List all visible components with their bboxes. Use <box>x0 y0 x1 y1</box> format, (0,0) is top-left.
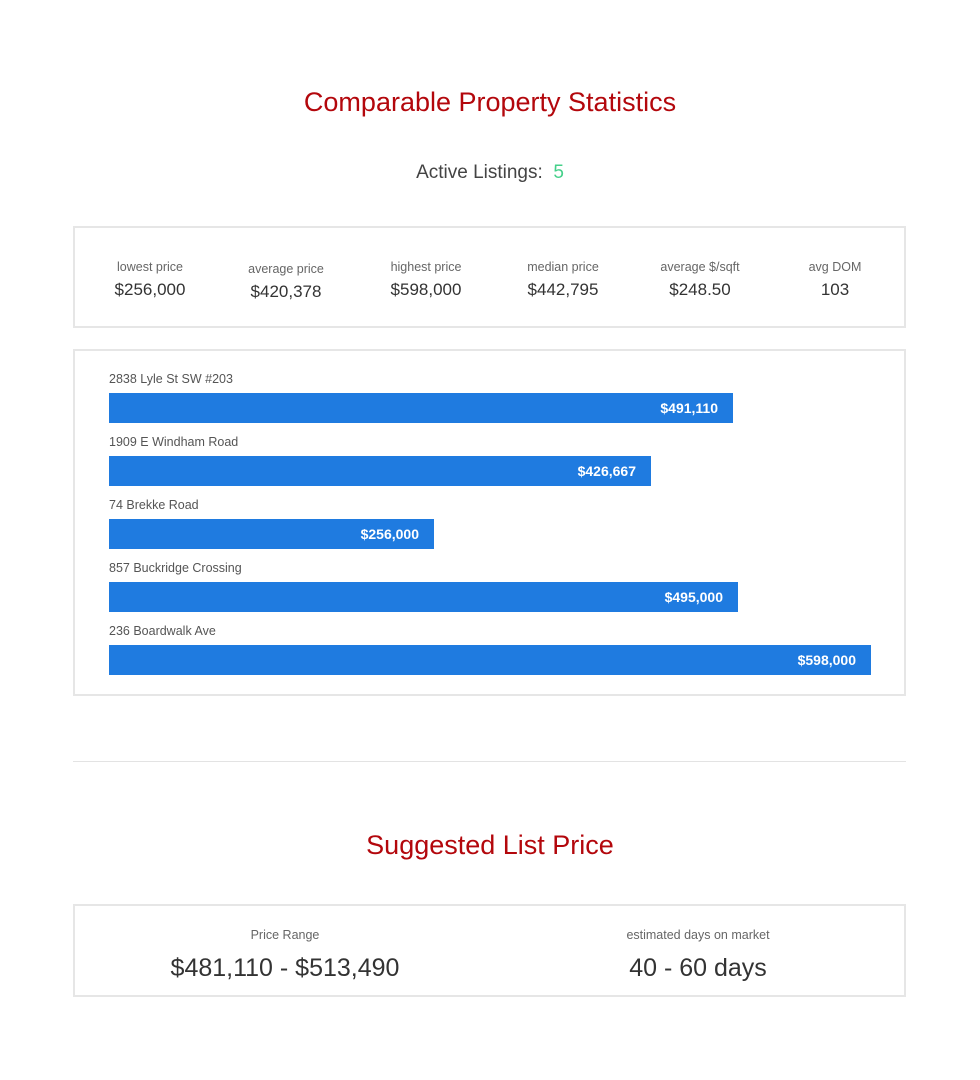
panel: bar chart <box>73 349 906 696</box>
price range <box>170 928 399 982</box>
stat: average $/sqft: $248.50 <box>669 280 731 299</box>
panel: summary stats <box>73 226 906 328</box>
bar 3 <box>109 519 434 549</box>
stat: median price: median price <box>527 260 599 274</box>
title: Comparable Property Statistics <box>304 87 676 117</box>
estimated days: estimated days on market <box>626 928 770 942</box>
panel: suggestion <box>73 904 906 997</box>
stat: average $/sqft: average $/sqft <box>660 260 740 274</box>
bar 4: $495,000 <box>665 589 723 605</box>
stat: median price <box>527 260 599 299</box>
stat: lowest price: $256,000 <box>115 280 185 299</box>
stat: lowest price: lowest price <box>117 260 183 274</box>
stat: average $/sqft <box>660 260 740 299</box>
stat: median price: $442,795 <box>528 280 598 299</box>
bar 2: $426,667 <box>578 463 636 479</box>
stat: highest price <box>390 260 461 299</box>
stat: highest price: highest price <box>391 260 461 274</box>
bar chart <box>109 372 871 675</box>
estimated days <box>626 928 770 982</box>
price range: Price Range <box>251 928 319 942</box>
label 4: 857 Buckridge Crossing <box>109 561 242 575</box>
bar 5: $598,000 <box>798 652 856 668</box>
stat: average price: average price <box>248 262 324 276</box>
stat: avg DOM: 103 <box>821 280 849 299</box>
label 1: 2838 Lyle St SW #203 <box>109 372 233 386</box>
heading: suggested list price: Suggested List Price <box>366 830 614 860</box>
stat: lowest price <box>114 260 185 299</box>
bar 1 <box>109 393 733 423</box>
stat: average price: $420,378 <box>251 282 321 301</box>
bar 1: $491,110 <box>660 400 718 416</box>
label 2: 1909 E Windham Road <box>109 435 238 449</box>
stat: avg DOM <box>809 260 861 299</box>
label 3: 74 Brekke Road <box>109 498 199 512</box>
label 5: 236 Boardwalk Ave <box>109 624 216 638</box>
stat: highest price: $598,000 <box>391 280 461 299</box>
active listings: Active Listings: 5 <box>416 162 564 183</box>
estimated days: 40 - 60 days <box>629 954 767 982</box>
bar 2 <box>109 456 651 486</box>
bar 4 <box>109 582 738 612</box>
bar 5 <box>109 645 871 675</box>
stat: average price <box>248 262 324 301</box>
bar 3: $256,000 <box>361 526 419 542</box>
price range: $481,110 - $513,490 <box>171 954 399 982</box>
stat: avg DOM: avg DOM <box>809 260 861 274</box>
